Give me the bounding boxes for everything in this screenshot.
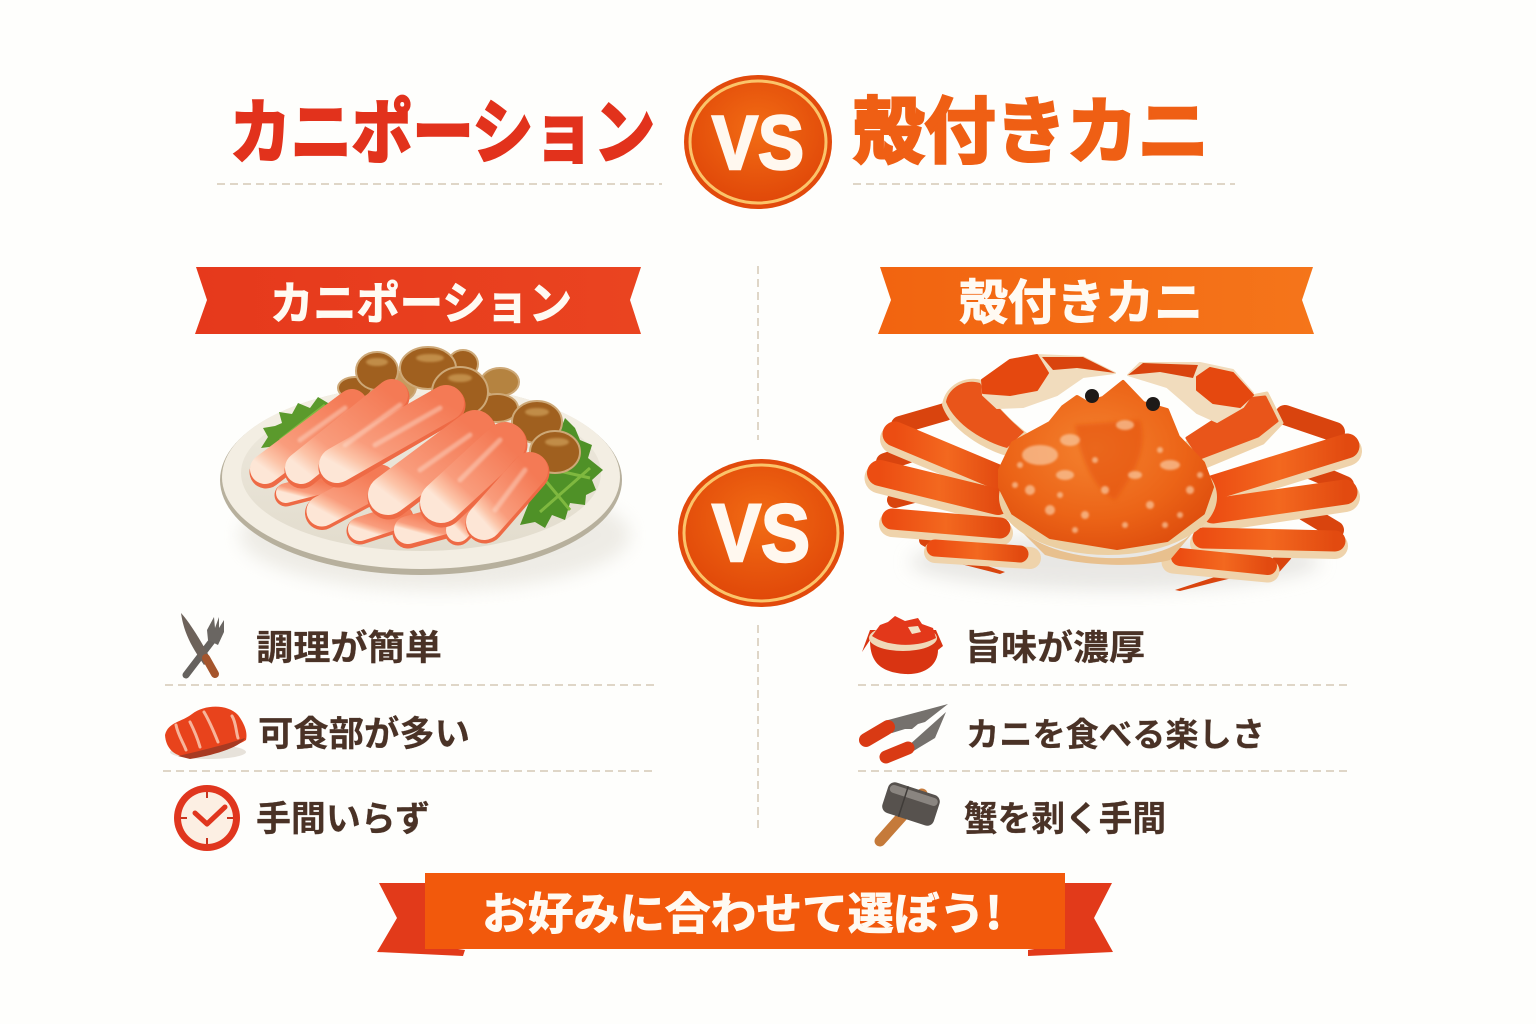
title: 殻付きカニ: 殻付きカニ <box>853 73 1209 178</box>
panel: right column <box>858 263 1350 842</box>
right leaves <box>520 418 603 528</box>
bottom ribbon: お好みに合わせて選ぼう! <box>482 878 1002 942</box>
item: 手間いらず: 手間いらず <box>256 791 430 842</box>
item: 調理が簡単: 調理が簡単 <box>256 620 442 671</box>
banner: 殻付きカニ: 殻付きカニ <box>959 263 1203 333</box>
icon: crab tongs <box>866 704 948 757</box>
sticks back <box>286 480 478 533</box>
VS badge: top <box>684 75 832 209</box>
item: 蟹を剥く手間 <box>880 780 1166 842</box>
item: 可食部が多い <box>163 706 653 771</box>
crab-shell ends <box>338 347 580 473</box>
banner: カニポーション <box>195 267 641 334</box>
item: 調理が簡単 <box>165 613 655 685</box>
item: 蟹を剥く手間: 蟹を剥く手間 <box>964 791 1166 842</box>
banner: 殻付きカニ <box>878 263 1314 334</box>
icon: crab meat <box>165 707 247 759</box>
icon: mallet <box>880 780 942 841</box>
left claw <box>942 355 1115 456</box>
VS badge: middle <box>678 459 844 607</box>
banner: カニポーション: カニポーション <box>270 267 572 332</box>
legs orange <box>880 434 1347 566</box>
VS badge: top: VS <box>712 101 804 186</box>
stick highlights <box>300 405 525 510</box>
sticks front <box>265 395 530 524</box>
back legs <box>885 412 1345 591</box>
VS badge: middle: VS <box>712 488 810 579</box>
bottom ribbon <box>377 873 1113 956</box>
under body <box>1020 530 1195 565</box>
left leaves <box>261 397 345 448</box>
speckles <box>1012 420 1203 533</box>
icon: knife and fork <box>181 613 224 675</box>
item: 旨味が濃厚: 旨味が濃厚 <box>965 620 1145 671</box>
item: 手間いらず <box>174 785 430 851</box>
right claw <box>1128 363 1282 468</box>
illustration: whole crab <box>880 355 1347 591</box>
eyes <box>1085 389 1099 403</box>
item: 旨味が濃厚 <box>858 616 1348 685</box>
illustration: crab portion plate <box>220 347 630 590</box>
icon: clock <box>174 785 240 851</box>
center divider <box>757 266 759 830</box>
title: カニポーション: カニポーション <box>230 77 655 178</box>
panel: left column <box>163 267 655 851</box>
icon: crab miso pot <box>862 616 943 674</box>
shell <box>999 382 1217 555</box>
item: カニを食べる楽しさ <box>858 704 1350 771</box>
item: 可食部が多い: 可食部が多い <box>258 706 470 757</box>
item: カニを食べる楽しさ: カニを食べる楽しさ <box>966 708 1265 756</box>
legs cream edge <box>880 439 1347 571</box>
shell blotches <box>1075 420 1143 500</box>
